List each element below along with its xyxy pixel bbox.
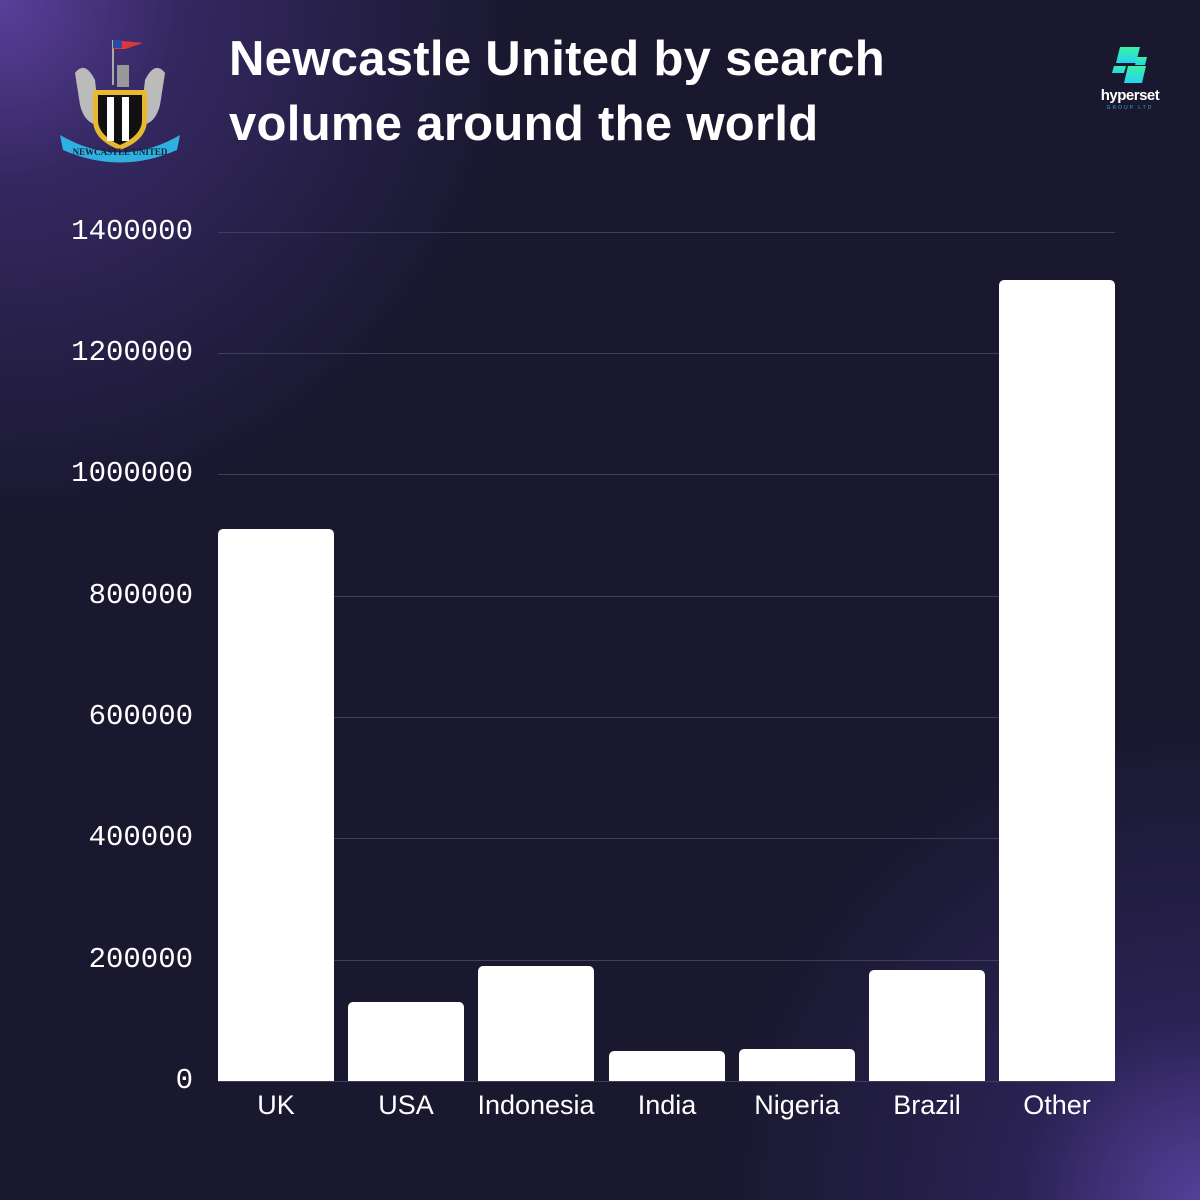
- bar chart: [71, 215, 1115, 1120]
- x-axis labels: India: [638, 1090, 696, 1120]
- y-axis labels: 1400000: [71, 215, 193, 248]
- y-axis labels: [71, 215, 193, 1097]
- logo: hyperset: GROUP LTD: [1107, 105, 1153, 111]
- title: volume around the world: [229, 97, 818, 151]
- x-axis labels: [257, 1090, 1091, 1120]
- x-axis labels: Other: [1023, 1090, 1091, 1120]
- y-axis labels: 800000: [89, 579, 193, 612]
- y-axis labels: 400000: [89, 821, 193, 854]
- x-axis labels: USA: [378, 1090, 434, 1120]
- title: Newcastle United by search: [229, 32, 885, 86]
- crest: Newcastle United: [60, 40, 180, 162]
- x-axis labels: Brazil: [893, 1090, 961, 1120]
- y-axis labels: 200000: [89, 943, 193, 976]
- logo: hyperset: hyperset: [1101, 87, 1159, 104]
- y-axis labels: 1000000: [71, 457, 193, 490]
- x-axis labels: Nigeria: [754, 1090, 840, 1120]
- x-axis labels: Indonesia: [477, 1090, 595, 1120]
- logo: hyperset: [1101, 47, 1160, 111]
- y-axis labels: 1200000: [71, 336, 193, 369]
- x-axis labels: UK: [257, 1090, 295, 1120]
- title: [229, 32, 885, 151]
- y-axis labels: 600000: [89, 700, 193, 733]
- y-axis labels: 0: [176, 1064, 193, 1097]
- crest: Newcastle United: NEWCASTLE UNITED: [73, 147, 168, 157]
